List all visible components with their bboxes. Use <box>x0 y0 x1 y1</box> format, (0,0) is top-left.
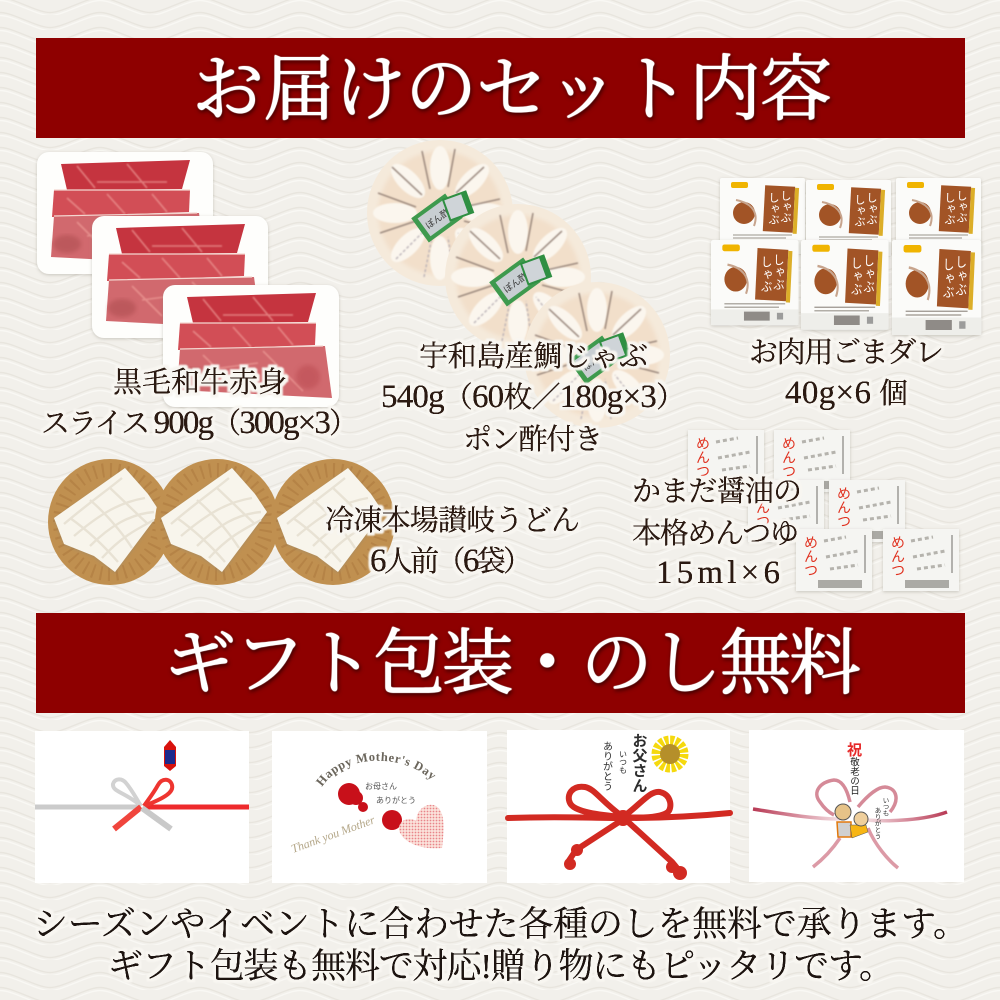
calligraphy: thanks father: お父さん <box>630 733 650 793</box>
heading band: set contents <box>36 38 965 138</box>
arched greeting: Happy Mother's Day <box>316 752 436 787</box>
calligraphy: celebration: 祝 <box>847 739 862 760</box>
script: thank you mother: Thank you Mother <box>289 812 377 856</box>
footer message: ギフト包装も無料で対応!贈り物にもピッタリです。 <box>108 947 894 986</box>
heading text: gift wrapping: ギフト包装・のし無料 <box>164 624 861 704</box>
label: mentsuyu: 15ml×6 <box>656 555 780 591</box>
label: mentsuyu: かまだ醤油の <box>632 475 802 508</box>
footer message <box>33 905 968 986</box>
item: Uwajima sea bream shabu <box>367 140 685 456</box>
footer message: シーズンやイベントに合わせた各種のしを無料で承ります。 <box>33 905 968 944</box>
label: sesame sauce: 40g×6 個 <box>785 375 908 411</box>
label: wagyu beef: 黒毛和牛赤身 <box>113 366 287 399</box>
heading band: gift wrapping <box>36 613 965 713</box>
heading text: set contents: お届けのセット内容 <box>192 50 832 130</box>
label: sea bream <box>381 340 685 456</box>
label: wagyu beef: スライス 900g（300g×3） <box>41 405 358 441</box>
calligraphy: celebration: 敬老の日 <box>848 756 862 795</box>
item: wagyu beef slices <box>37 152 358 441</box>
label: udon <box>325 504 580 579</box>
label: udon: 6人前（6袋） <box>370 543 532 579</box>
icon: elderly couple <box>835 804 868 838</box>
label: wagyu beef <box>41 366 358 441</box>
calligraphy: thanks father <box>600 733 650 793</box>
flowers <box>338 783 402 830</box>
noshi card: Father's Day <box>507 730 730 883</box>
label: sesame sauce <box>749 336 944 411</box>
calligraphy: celebration: ありがとう <box>873 807 883 840</box>
calligraphy: thanks father: ありがとう <box>600 741 616 791</box>
label: udon: 冷凍本場讃岐うどん <box>325 504 580 537</box>
noshi card: Mother's Day <box>272 731 487 883</box>
label: sesame sauce: お肉用ごまダレ <box>749 336 944 369</box>
item: sesame sauce packs <box>711 178 981 411</box>
thanks message: お母さん <box>365 781 397 792</box>
thanks message: ありがとう <box>376 795 416 806</box>
label: mentsuyu: 本格めんつゆ <box>632 517 799 550</box>
label: sea bream: 宇和島産鯛じゃぶ <box>419 340 648 373</box>
noshi card: standard ribbon <box>35 731 249 883</box>
icon: lace heart <box>399 805 444 848</box>
calligraphy: thanks father: いつも <box>618 750 628 774</box>
calligraphy: celebration: いつも <box>881 797 891 817</box>
label: sea bream: ポン酢付き <box>463 423 603 456</box>
calligraphy: celebration <box>847 739 891 840</box>
item: Kamada mentsuyu packs <box>632 430 959 591</box>
noshi card: Respect for the Aged Day <box>749 730 964 882</box>
icon: noshi ornament <box>164 740 176 771</box>
label: mentsuyu <box>632 475 802 591</box>
item: sanuki udon <box>48 459 580 585</box>
icon: sunflower <box>656 740 684 768</box>
thanks message <box>365 781 416 806</box>
label: sea bream: 540g（60枚／180g×3） <box>381 379 685 415</box>
